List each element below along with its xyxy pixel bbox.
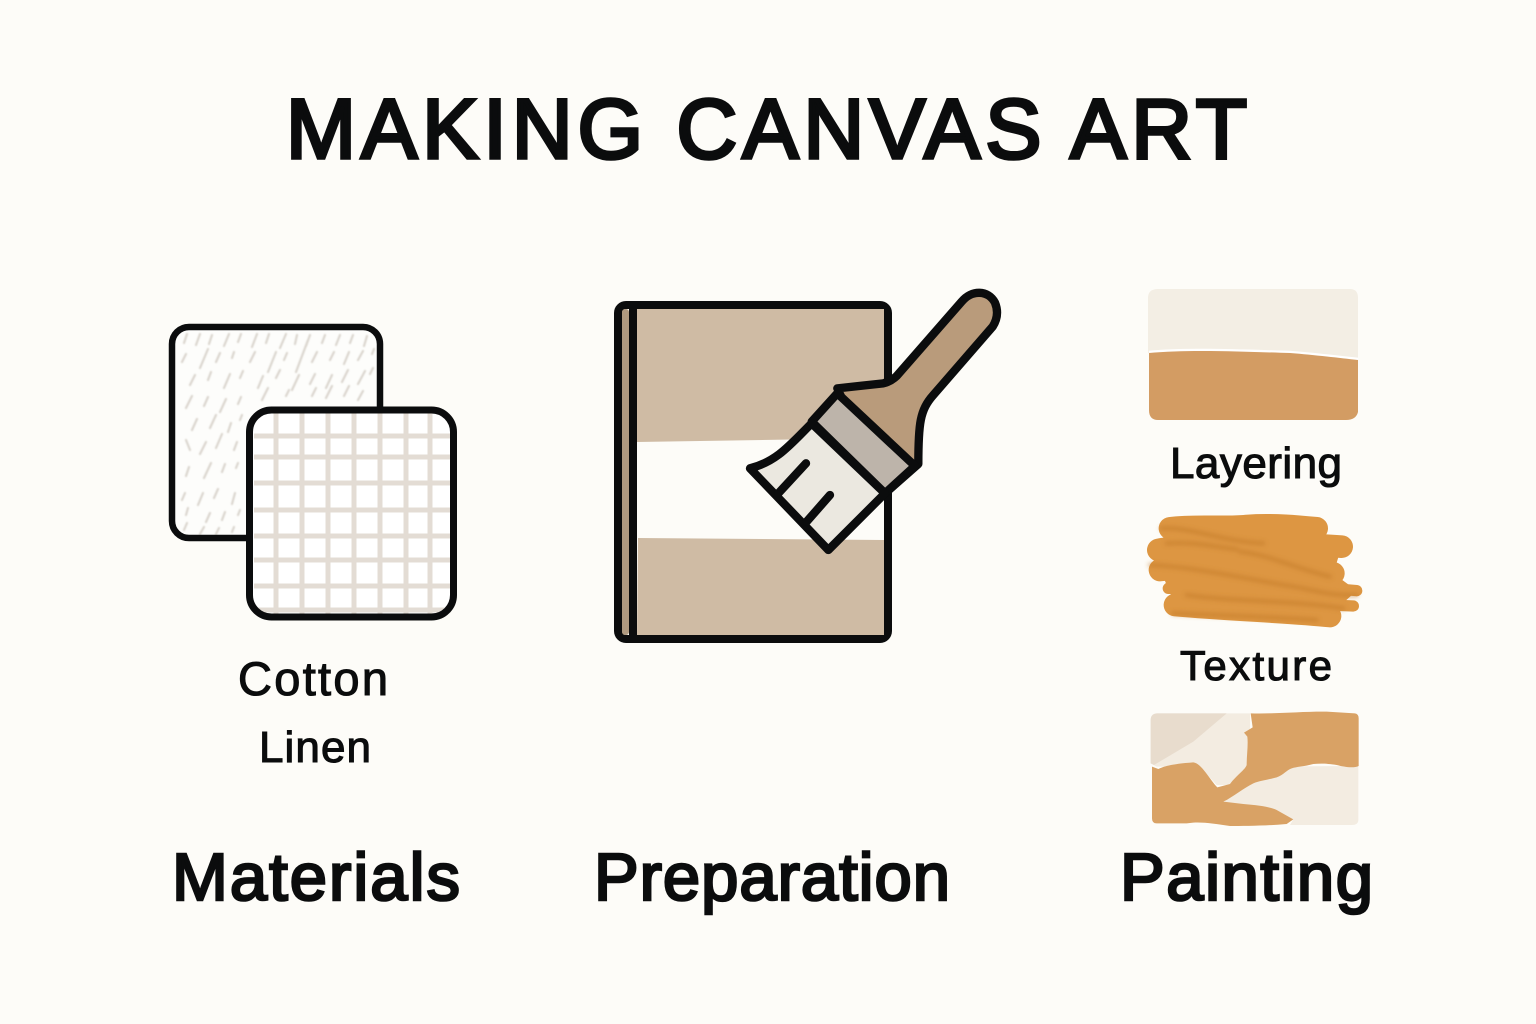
heading: painting: Painting <box>1120 840 1373 915</box>
swatch: texture <box>1150 525 1357 620</box>
panel: materials <box>172 327 460 915</box>
heading: preparation: Preparation <box>594 840 950 915</box>
swatch: layering <box>1148 289 1358 420</box>
panel: preparation <box>594 293 997 915</box>
label: layering: Layering <box>1170 439 1342 488</box>
title: MAKING CANVAS ART <box>286 82 1247 176</box>
swatch: abstract blend <box>1151 712 1359 826</box>
icon: paint brush <box>750 293 997 550</box>
label: linen: Linen <box>259 723 371 772</box>
label: texture: Texture <box>1180 642 1332 689</box>
icon: linen swatch <box>250 410 454 617</box>
icon: primed canvas <box>618 304 888 639</box>
panel: painting <box>1120 289 1373 915</box>
icon: cotton swatch <box>172 327 380 538</box>
label: cotton: Cotton <box>238 652 388 705</box>
heading: materials: Materials <box>172 840 460 915</box>
